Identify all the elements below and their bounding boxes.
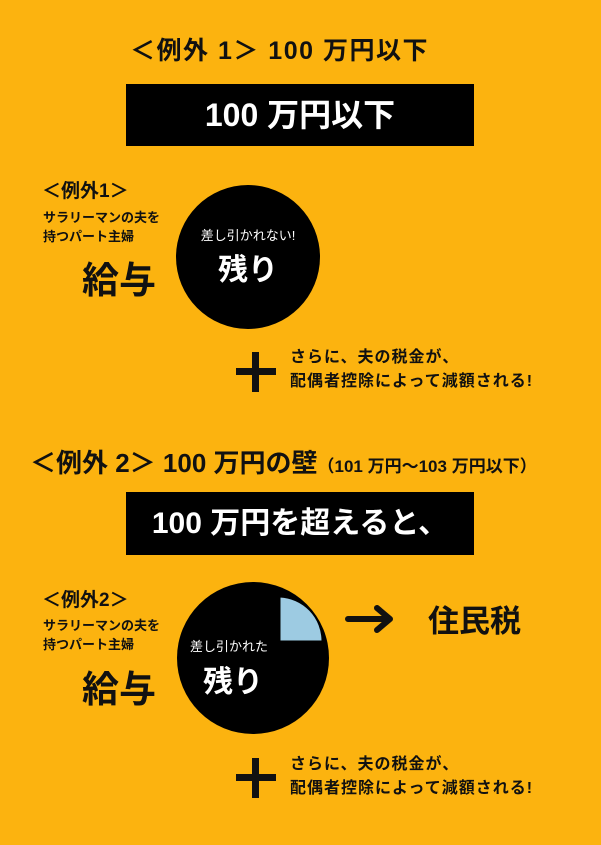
text: deduction 2 xyxy=(290,755,533,797)
text: part-time wife 2: 持つパート主婦 xyxy=(43,637,134,652)
text: deduction 1: さらに、夫の税金が、 xyxy=(290,349,459,366)
arrow xyxy=(345,605,393,633)
circle text 1: 差し引かれない! xyxy=(201,228,295,243)
text: deduction 2: 配偶者控除によって減額される! xyxy=(290,780,533,797)
label: salary 1: 給与 xyxy=(82,260,156,301)
circle 1 xyxy=(176,185,320,329)
label: resident tax: 住民税 xyxy=(428,604,521,639)
text: part-time wife 1: サラリーマンの夫を xyxy=(43,210,160,225)
text: part-time wife 1: 持つパート主婦 xyxy=(43,229,134,244)
text: deduction 2: さらに、夫の税金が、 xyxy=(290,756,459,773)
icon: plus 2 xyxy=(236,758,276,798)
circle label 2: 残り xyxy=(203,666,263,699)
banner 2 xyxy=(126,492,474,555)
heading 2: ＜例外 2＞ 100 万円の壁（101 万円〜103 万円以下） xyxy=(30,448,537,478)
banner 1: 100 万円以下 xyxy=(205,97,395,133)
icon: plus 1 xyxy=(236,352,276,392)
circle text 2: 差し引かれた xyxy=(190,639,268,654)
label: example 1: ＜例外1＞ xyxy=(42,181,129,202)
banner 2: 100 万円を超えると、 xyxy=(152,507,448,540)
text: part-time wife 1 xyxy=(43,210,160,244)
circle label 1: 残り xyxy=(218,254,278,287)
text: part-time wife 2: サラリーマンの夫を xyxy=(43,618,160,633)
label: example 2: ＜例外2＞ xyxy=(42,590,129,611)
text: deduction 1: 配偶者控除によって減額される! xyxy=(290,373,533,390)
title: ＜例外 1＞ 100 万円以下 xyxy=(130,37,429,65)
label: salary 2: 給与 xyxy=(82,669,156,710)
text: deduction 1 xyxy=(290,348,533,390)
text: part-time wife 2 xyxy=(43,618,160,652)
banner 1 xyxy=(126,84,474,146)
